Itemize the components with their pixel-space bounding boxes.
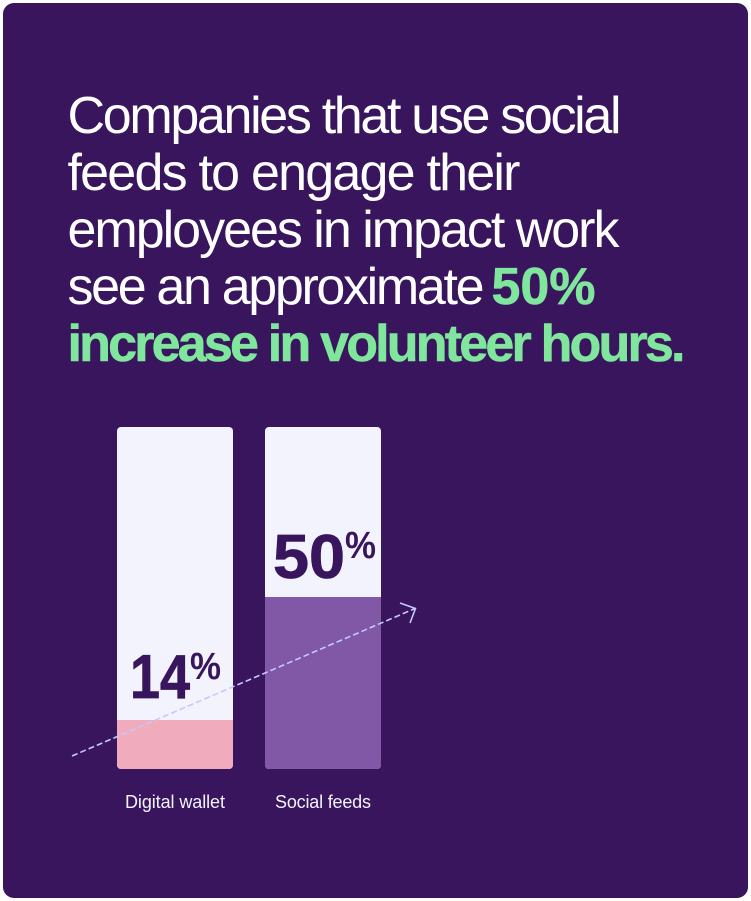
value: 14%: % <box>190 646 221 688</box>
title: Companies that use social <box>68 87 622 145</box>
title: feeds to engage their <box>68 144 520 202</box>
title: see an approximate <box>68 258 484 316</box>
label: social feeds: Social feeds <box>275 792 371 812</box>
value: 50%: 50 <box>273 523 345 592</box>
value: 50% <box>273 523 376 592</box>
label: digital wallet: Digital wallet <box>125 792 225 812</box>
bar chart <box>117 427 381 812</box>
arrow: upward trend <box>72 603 416 756</box>
value: 50%: % <box>345 525 376 567</box>
title: 50% <box>492 258 596 316</box>
title: employees in impact work <box>68 201 620 259</box>
title <box>68 87 686 373</box>
title: increase in volunteer hours. <box>68 315 686 373</box>
bar: social feeds <box>265 427 381 769</box>
value: 14%: 14 <box>130 643 190 712</box>
bar: digital wallet <box>117 427 233 769</box>
